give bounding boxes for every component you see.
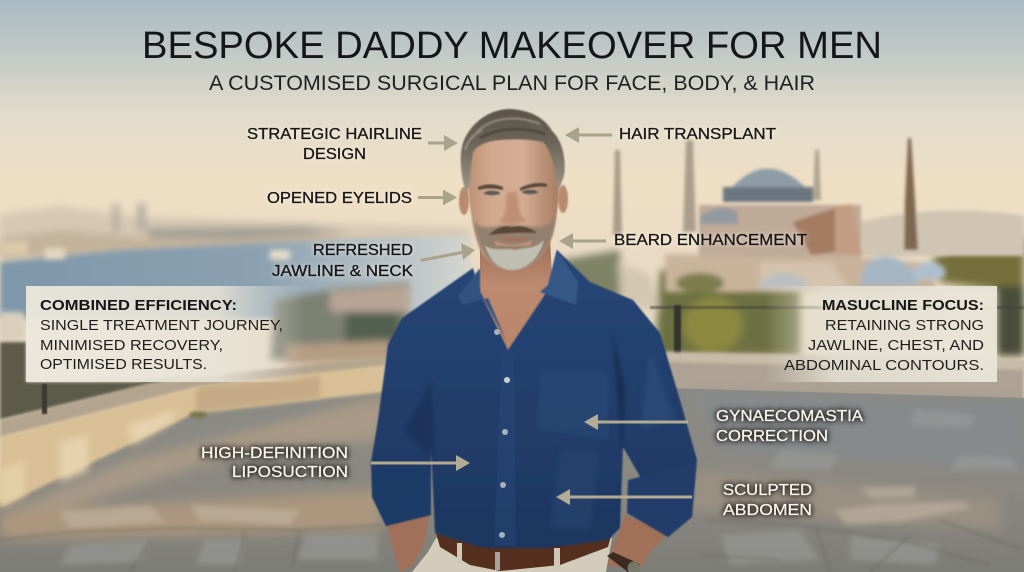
- mustache and mouth: [489, 226, 537, 241]
- eyes and brows: [478, 183, 547, 195]
- background: left stone wall and railing: [0, 342, 385, 507]
- panel heading: combined efficiency: COMBINED EFFICIENCY:: [40, 297, 237, 314]
- arrow: strategic hairline design: [428, 135, 458, 151]
- label: high-definition liposuction: LIPOSUCTION: [232, 464, 348, 481]
- cheek patch above mouth: [494, 240, 532, 246]
- arrow: gynaecomastia correction: [584, 414, 688, 430]
- label: strategic hairline design: [247, 126, 422, 163]
- forearms and hands: [385, 514, 668, 572]
- arrow: hair transplant: [565, 127, 612, 143]
- panel text: combined efficiency: SINGLE TREATMENT JOURNEY,: [40, 317, 283, 334]
- panel text: masculine focus: RETAINING STRONG: [825, 317, 984, 334]
- beard stubble: [473, 216, 555, 270]
- label: beard enhancement: BEARD ENHANCEMENT: [614, 232, 808, 249]
- face: [468, 132, 559, 270]
- belt: [436, 533, 611, 571]
- wristwatch: [607, 552, 640, 572]
- label: refreshed jawline and neck: [272, 242, 414, 280]
- arrow: opened eyelids: [418, 190, 457, 206]
- label: sculpted abdomen: ABDOMEN: [723, 502, 812, 519]
- panel heading: masculine focus: MASUCLINE FOCUS:: [822, 297, 984, 314]
- neck: [470, 240, 558, 352]
- shirt: [371, 250, 697, 548]
- hair highlights: [465, 118, 545, 150]
- trousers: [412, 538, 612, 572]
- arrow: beard enhancement: [559, 233, 606, 249]
- nose: [499, 192, 527, 225]
- label: gynaecomastia correction: GYNAECOMASTIA: [716, 408, 864, 425]
- subtitle: A CUSTOMISED SURGICAL PLAN FOR FACE, BODY, & HAIR: [209, 72, 815, 95]
- man in navy shirt: [371, 109, 697, 572]
- panel: masculine focus: [765, 286, 997, 382]
- panel text: masculine focus: ABDOMINAL CONTOURS.: [784, 357, 984, 374]
- panel text: combined efficiency: [40, 317, 283, 373]
- label: sculpted abdomen: SCULPTED: [723, 482, 812, 499]
- label: opened eyelids: OPENED EYELIDS: [267, 190, 412, 207]
- arrow: refreshed jawline and neck: [420, 243, 475, 262]
- title: BESPOKE DADDY MAKEOVER FOR MEN: [142, 25, 882, 67]
- background: railing and far wall right: [650, 305, 1024, 402]
- label: refreshed jawline and neck: JAWLINE & NECK: [272, 263, 414, 280]
- ears: [459, 185, 568, 215]
- panel text: combined efficiency: OPTIMISED RESULTS.: [40, 356, 207, 373]
- background: hill and Hagia Sophia mosque: [613, 138, 1024, 293]
- panel: combined efficiency: [26, 286, 306, 382]
- label: high-definition liposuction: HIGH-DEFINITION: [201, 445, 348, 462]
- label: strategic hairline design: DESIGN: [303, 146, 366, 163]
- panel text: combined efficiency: MINIMISED RECOVERY,: [40, 337, 223, 354]
- background: terrace ground: [0, 388, 1024, 572]
- label: gynaecomastia correction: [716, 408, 864, 445]
- panel text: masculine focus: JAWLINE, CHEST, AND: [808, 337, 984, 354]
- hair: [461, 109, 565, 196]
- label: gynaecomastia correction: CORRECTION: [716, 428, 828, 445]
- background: distant city and water: [0, 203, 470, 340]
- panel text: masculine focus: [784, 317, 984, 374]
- arrow: high-definition liposuction: [371, 455, 470, 471]
- placket and buttons: [494, 329, 516, 546]
- label: refreshed jawline and neck: REFRESHED: [313, 242, 413, 259]
- label: high-definition liposuction: [201, 445, 348, 481]
- label: strategic hairline design: STRATEGIC HAIRLINE: [247, 126, 422, 143]
- arrow: sculpted abdomen: [556, 489, 692, 505]
- chin grey beard: [485, 240, 544, 270]
- label: hair transplant: HAIR TRANSPLANT: [619, 126, 777, 143]
- collar: [458, 250, 578, 340]
- background: trees and buildings behind railing: [270, 236, 1024, 365]
- label: sculpted abdomen: [723, 482, 812, 519]
